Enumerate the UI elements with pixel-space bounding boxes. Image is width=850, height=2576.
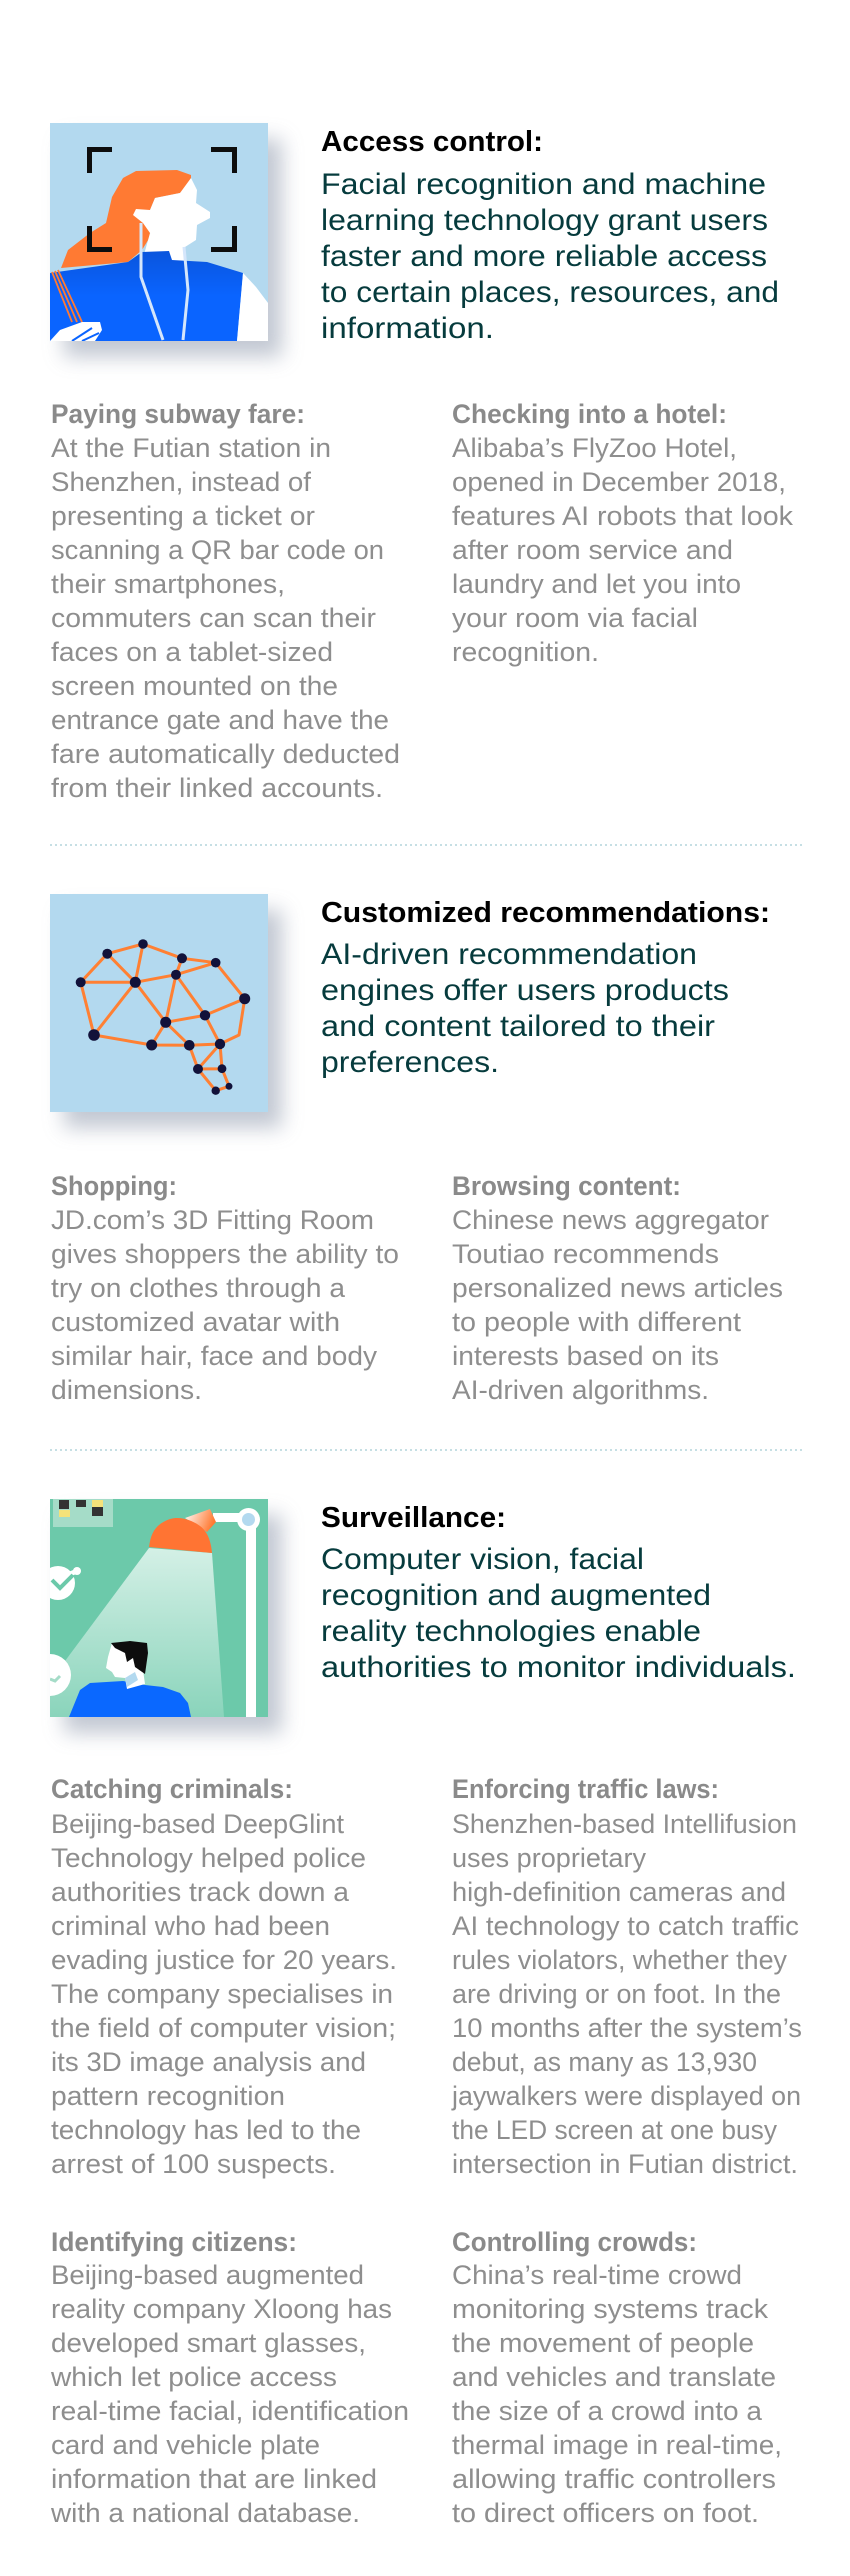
text block: checking into a hotel: laundry and let you into bbox=[452, 569, 741, 599]
text block: paying subway fare: screen mounted on the bbox=[51, 671, 338, 701]
description: access control: Facial recognition and machine bbox=[321, 168, 766, 201]
text block: catching criminals: The company specialises in bbox=[51, 1979, 393, 2009]
illustration: brain network bbox=[50, 894, 282, 1128]
text block: shopping: try on clothes through a bbox=[51, 1273, 345, 1303]
heading: surveillance: Surveillance: bbox=[321, 1502, 506, 1534]
text block: enforcing traffic laws: are driving or on foot. In the bbox=[452, 1979, 781, 2009]
text block: paying subway fare: presenting a ticket or bbox=[51, 501, 315, 531]
text block: browsing content: Toutiao recommends bbox=[452, 1239, 719, 1269]
text block: paying subway fare: entrance gate and have the bbox=[51, 705, 389, 735]
text block: shopping: Shopping: bbox=[51, 1171, 177, 1201]
text block: paying subway fare: commuters can scan their bbox=[51, 603, 376, 633]
text block: controlling crowds: and vehicles and translate bbox=[452, 2362, 776, 2392]
description: customized recommendations: engines offer users products bbox=[321, 974, 729, 1007]
text block: browsing content: Browsing content: bbox=[452, 1171, 681, 1201]
text block: paying subway fare: Shenzhen, instead of bbox=[51, 467, 312, 497]
text block: shopping: dimensions. bbox=[51, 1375, 202, 1405]
panel: surveillance bbox=[29, 1499, 802, 2528]
text block: controlling crowds: thermal image in real-time, bbox=[452, 2430, 782, 2460]
text block: enforcing traffic laws: Shenzhen-based Intellifusion bbox=[452, 1809, 797, 1839]
text block: controlling crowds: the size of a crowd into a bbox=[452, 2396, 762, 2426]
description: surveillance: authorities to monitor individuals. bbox=[321, 1651, 796, 1684]
text block: controlling crowds: to direct officers on foot. bbox=[452, 2498, 759, 2528]
text block: enforcing traffic laws: AI technology to catch traffic bbox=[452, 1911, 799, 1941]
text block: shopping: similar hair, face and body bbox=[51, 1341, 378, 1371]
text block: catching criminals: the field of computer vision; bbox=[51, 2013, 396, 2043]
text block: catching criminals: Beijing-based DeepGlint bbox=[51, 1809, 345, 1839]
description: surveillance bbox=[321, 1543, 796, 1684]
description: access control bbox=[321, 168, 779, 345]
text block: browsing content: Chinese news aggregator bbox=[452, 1205, 769, 1235]
text block: enforcing traffic laws: rules violators, whether they bbox=[452, 1945, 788, 1975]
text block: checking into a hotel: features AI robots that look bbox=[452, 501, 794, 531]
text block: shopping: gives shoppers the ability to bbox=[51, 1239, 399, 1269]
heading: customized recommendations: Customized recommendations: bbox=[321, 897, 770, 929]
text block: controlling crowds: Controlling crowds: bbox=[452, 2227, 697, 2257]
text block: shopping bbox=[51, 1171, 399, 1405]
text block: identifying citizens: card and vehicle plate bbox=[51, 2430, 320, 2460]
text block: checking into a hotel: opened in December 2018, bbox=[452, 467, 786, 497]
text block: browsing content: personalized news articles bbox=[452, 1273, 783, 1303]
text block: enforcing traffic laws: intersection in Futian district. bbox=[452, 2149, 798, 2179]
text block: identifying citizens: Beijing-based augmented bbox=[51, 2260, 364, 2290]
text block: identifying citizens: which let police access bbox=[50, 2362, 337, 2392]
text block: catching criminals: authorities track down a bbox=[51, 1877, 349, 1907]
text block: enforcing traffic laws: high-definition cameras and bbox=[452, 1877, 786, 1907]
description: access control: faster and more reliable access bbox=[321, 240, 767, 273]
text block: identifying citizens: information that are linked bbox=[51, 2464, 377, 2494]
text block: controlling crowds: allowing traffic controllers bbox=[452, 2464, 776, 2494]
text block: paying subway fare: scanning a QR bar code on bbox=[51, 535, 384, 565]
text block: enforcing traffic laws: debut, as many as 13,930 bbox=[452, 2047, 757, 2077]
text block: checking into a hotel: Checking into a hotel: bbox=[452, 399, 727, 429]
text block: enforcing traffic laws: Enforcing traffic laws: bbox=[452, 1774, 719, 1804]
text block: controlling crowds: monitoring systems track bbox=[452, 2294, 769, 2324]
text block: controlling crowds: the movement of people bbox=[452, 2328, 754, 2358]
text block: catching criminals: pattern recognition bbox=[51, 2081, 285, 2111]
text block: checking into a hotel: your room via facial bbox=[452, 603, 698, 633]
text block: catching criminals: its 3D image analysis and bbox=[51, 2047, 366, 2077]
text block: checking into a hotel bbox=[452, 399, 794, 667]
text block: identifying citizens: real-time facial, identification bbox=[51, 2396, 409, 2426]
description: surveillance: reality technologies enable bbox=[321, 1615, 701, 1648]
text block: checking into a hotel: after room service and bbox=[452, 535, 733, 565]
text block: catching criminals: Technology helped police bbox=[51, 1843, 366, 1873]
illustration: woman with face scan bbox=[50, 123, 282, 357]
text block: browsing content: AI-driven algorithms. bbox=[452, 1375, 709, 1405]
panel: customized recommendations bbox=[50, 894, 783, 1405]
text block: paying subway fare bbox=[51, 399, 400, 803]
text block: checking into a hotel: recognition. bbox=[452, 637, 599, 667]
text block: identifying citizens: Identifying citizens: bbox=[51, 2227, 297, 2257]
illustration: man under street lamp bbox=[29, 1499, 282, 1733]
description: access control: to certain places, resources, and bbox=[321, 276, 779, 309]
text block: enforcing traffic laws: 10 months after the system’s bbox=[452, 2013, 802, 2043]
text block: catching criminals: criminal who had been bbox=[51, 1911, 330, 1941]
text block: shopping: JD.com’s 3D Fitting Room bbox=[51, 1205, 374, 1235]
text block: paying subway fare: their smartphones, bbox=[51, 569, 285, 599]
text block: paying subway fare: faces on a tablet-sized bbox=[51, 637, 333, 667]
text block: identifying citizens bbox=[50, 2227, 409, 2528]
description: access control: learning technology grant users bbox=[321, 204, 768, 237]
panel: access control bbox=[50, 123, 794, 803]
text block: paying subway fare: Paying subway fare: bbox=[51, 399, 305, 429]
description: surveillance: recognition and augmented bbox=[321, 1579, 711, 1612]
text block: browsing content: to people with different bbox=[452, 1307, 742, 1337]
text block: controlling crowds: China’s real-time crowd bbox=[452, 2260, 742, 2290]
text block: catching criminals: technology has led to the bbox=[51, 2115, 361, 2145]
text block: catching criminals bbox=[51, 1774, 397, 2179]
description: surveillance: Computer vision, facial bbox=[321, 1543, 644, 1576]
text block: paying subway fare: fare automatically deducted bbox=[51, 739, 400, 769]
text block: shopping: customized avatar with bbox=[51, 1307, 340, 1337]
text block: paying subway fare: from their linked accounts. bbox=[51, 773, 383, 803]
text block: enforcing traffic laws: the LED screen at one busy bbox=[452, 2115, 778, 2145]
text block: controlling crowds bbox=[452, 2227, 782, 2528]
description: customized recommendations bbox=[321, 938, 729, 1079]
heading: access control: Access control: bbox=[321, 126, 543, 158]
description: customized recommendations: preferences. bbox=[321, 1046, 499, 1079]
text block: enforcing traffic laws bbox=[451, 1774, 802, 2179]
text block: browsing content bbox=[452, 1171, 783, 1405]
description: customized recommendations: AI-driven recommendation bbox=[321, 938, 697, 971]
text block: identifying citizens: developed smart glasses, bbox=[51, 2328, 366, 2358]
text block: browsing content: interests based on its bbox=[452, 1341, 719, 1371]
text block: identifying citizens: with a national database. bbox=[50, 2498, 360, 2528]
text block: paying subway fare: At the Futian station in bbox=[51, 433, 331, 463]
text block: identifying citizens: reality company Xloong has bbox=[51, 2294, 392, 2324]
text block: checking into a hotel: Alibaba’s FlyZoo Hotel, bbox=[452, 433, 737, 463]
text block: catching criminals: arrest of 100 suspects. bbox=[51, 2149, 336, 2179]
text block: catching criminals: evading justice for 20 years. bbox=[51, 1945, 397, 1975]
text block: enforcing traffic laws: uses proprietary bbox=[452, 1843, 647, 1873]
description: customized recommendations: and content tailored to their bbox=[321, 1010, 715, 1043]
text block: enforcing traffic laws: jaywalkers were displayed on bbox=[451, 2081, 801, 2111]
text block: catching criminals: Catching criminals: bbox=[51, 1774, 293, 1804]
description: access control: information. bbox=[321, 312, 494, 345]
